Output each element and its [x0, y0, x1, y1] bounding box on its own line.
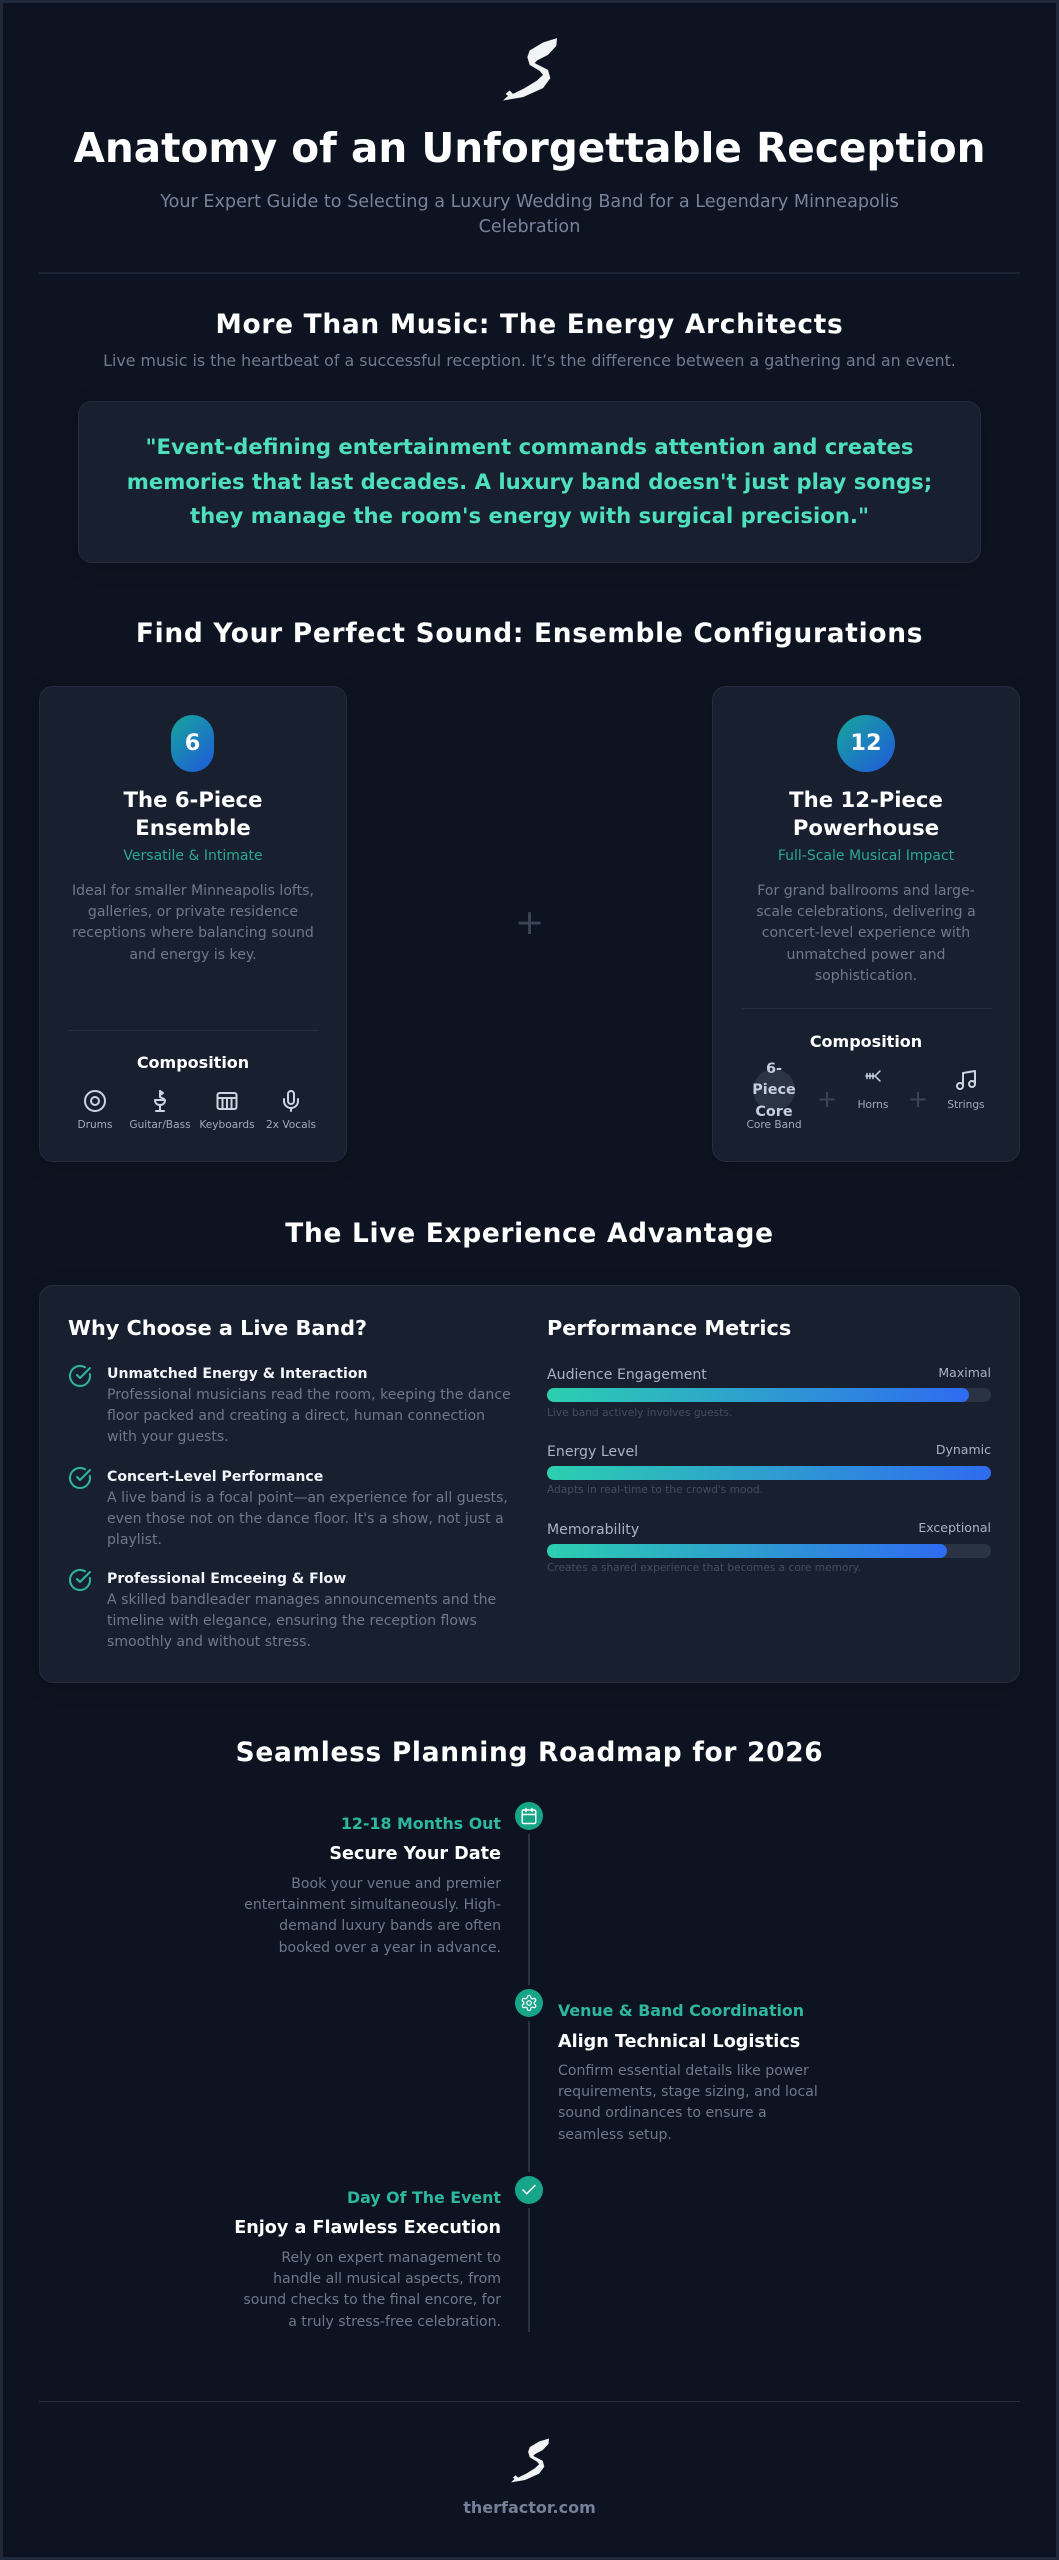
benefit 1 — [68, 1364, 511, 1445]
composition heading: Composition — [810, 1032, 922, 1051]
benefit text — [107, 1387, 511, 1445]
label: strings: Strings — [947, 1099, 985, 1111]
step 1 text — [244, 1876, 501, 1956]
icon: vocals — [283, 1090, 299, 1112]
card title: The 6-Piece — [124, 787, 262, 812]
metric label: energy level: Energy Level — [547, 1444, 638, 1460]
card title: Ensemble — [135, 815, 251, 840]
card description: and energy is key. — [129, 947, 257, 963]
heading: ensemble configurations: Find Your Perfect Sound: Ensemble Configurations — [136, 618, 923, 649]
icon: horns — [865, 1070, 881, 1082]
intro text: Live music is the heartbeat of a successful reception. It’s the difference between a gathering and an event. — [103, 351, 956, 370]
benefit text: timeline with elegance, ensuring the reception flows — [107, 1613, 477, 1629]
subtitle: Your Expert Guide to Selecting a Luxury Wedding Band for a Legendary Minneapolis — [160, 192, 899, 212]
step 3 text: a truly stress-free celebration. — [288, 2314, 501, 2330]
card title — [124, 787, 262, 840]
core band text: 6- — [766, 1061, 782, 1077]
metric bar: audience engagement — [547, 1388, 991, 1402]
label: keyboards: Keyboards — [199, 1119, 255, 1131]
callout: quote — [78, 401, 981, 563]
timeline node: check — [515, 2176, 543, 2204]
card title — [789, 787, 943, 840]
label: core band: Core Band — [746, 1119, 802, 1131]
footer link: therfactor.com — [463, 2498, 596, 2517]
benefit text: A live band is a focal point—an experience for all guests, — [107, 1490, 508, 1506]
subtitle — [160, 192, 899, 237]
icon: plus between cards: + — [515, 903, 544, 943]
benefit text — [107, 1490, 508, 1548]
icon: keyboards — [216, 1092, 238, 1110]
label: drums: Drums — [77, 1119, 113, 1131]
card description: galleries, or private residence — [88, 904, 298, 920]
benefit title: Unmatched Energy & Interaction — [107, 1366, 368, 1382]
panel: 6-piece ensemble — [39, 686, 347, 1162]
icon: check — [68, 1568, 91, 1591]
benefit text: smoothly and without stress. — [107, 1634, 311, 1650]
metric value: maximal: Maximal — [938, 1365, 991, 1380]
benefit 3 — [68, 1568, 496, 1650]
card tagline: Versatile & Intimate — [123, 848, 263, 864]
badge: 6 — [171, 715, 214, 772]
label: vocals: 2x Vocals — [266, 1119, 316, 1131]
card description — [756, 883, 976, 984]
composition heading: Composition — [137, 1053, 249, 1072]
metric value: dynamic: Dynamic — [936, 1442, 991, 1457]
card title: Powerhouse — [793, 815, 939, 840]
metric note: Live band actively involves guests. — [547, 1407, 732, 1419]
step 2 text: seamless setup. — [558, 2127, 672, 2143]
step 1 text: entertainment simultaneously. High- — [244, 1897, 501, 1913]
card description: unmatched power and — [787, 947, 945, 963]
step 3 text: Rely on expert management to — [281, 2250, 501, 2266]
heading: live experience: The Live Experience Advantage — [285, 1218, 774, 1248]
step 3 text: sound checks to the final encore, for — [243, 2292, 501, 2308]
timeline node: gear — [515, 1989, 543, 2017]
header divider — [39, 272, 1020, 274]
badge: 6: 6 — [185, 730, 200, 756]
metric bar: energy level — [547, 1466, 991, 1480]
metric note: Adapts in real-time to the crowd's mood. — [547, 1484, 763, 1496]
card description: For grand ballrooms and large- — [757, 883, 975, 899]
card tagline: Full-Scale Musical Impact — [778, 848, 954, 864]
icon: plus: + — [817, 1085, 837, 1113]
subtitle: Celebration — [479, 217, 580, 237]
step 1 text: demand luxury bands are often — [279, 1918, 501, 1934]
step 2 text: sound ordinances to ensure a — [558, 2105, 767, 2121]
benefit text: even those not on the dance floor. It's a show, not just a — [107, 1511, 504, 1527]
benefit title: Concert-Level Performance — [107, 1469, 323, 1485]
composition divider — [742, 1008, 992, 1009]
step 3 text: handle all musical aspects, from — [273, 2271, 501, 2287]
metric value: exceptional: Exceptional — [918, 1520, 991, 1535]
icon: check — [68, 1466, 91, 1489]
title: Anatomy of an Unforgettable Reception — [73, 124, 986, 172]
step 1 text: Book your venue and premier — [291, 1876, 501, 1892]
card description: Ideal for smaller Minneapolis lofts, — [72, 883, 314, 899]
step 2 label: Venue & Band Coordination — [558, 2001, 804, 2020]
benefit text — [107, 1592, 496, 1650]
quote text — [127, 434, 932, 528]
card description: scale celebrations, delivering a — [756, 904, 976, 920]
heading: roadmap: Seamless Planning Roadmap for 2026 — [236, 1736, 823, 1768]
core band text: Core — [755, 1104, 793, 1120]
card description: sophistication. — [815, 968, 917, 984]
panel: live experience — [39, 1285, 1020, 1683]
icon: guitar/bass — [154, 1090, 166, 1112]
metric label: audience engagement: Audience Engagement — [547, 1367, 707, 1383]
metric label: memorability: Memorability — [547, 1522, 639, 1538]
quote text: memories that last decades. A luxury band doesn't just play songs; — [127, 469, 932, 494]
core band text — [752, 1061, 796, 1120]
benefit text: with your guests. — [107, 1429, 229, 1445]
badge: 12 — [837, 715, 895, 772]
step 2 title: Align Technical Logistics — [558, 2032, 800, 2052]
panel: 12-piece powerhouse — [712, 686, 1020, 1162]
benefit text: A skilled bandleader manages announcements and the — [107, 1592, 496, 1608]
heading: energy architects: More Than Music: The Energy Architects — [216, 309, 843, 340]
timeline line — [528, 1816, 530, 2332]
core band circle — [753, 1069, 795, 1111]
icon: strings — [956, 1070, 976, 1090]
label: horns: Horns — [858, 1099, 888, 1111]
quote text: they manage the room's energy with surgical precision." — [190, 503, 869, 528]
quote text: "Event-defining entertainment commands attention and creates — [145, 434, 914, 459]
benefit text: Professional musicians read the room, keeping the dance — [107, 1387, 511, 1403]
core band text: Piece — [752, 1082, 796, 1098]
metric bar: memorability — [547, 1544, 991, 1558]
composition divider — [68, 1030, 318, 1031]
step 3 text — [243, 2250, 501, 2330]
step 2 text — [558, 2063, 818, 2143]
benefit 2 — [68, 1466, 508, 1548]
icon: check — [68, 1364, 91, 1387]
benefit text: playlist. — [107, 1532, 162, 1548]
step 2 text: Confirm essential details like power — [558, 2063, 809, 2079]
icon: drums — [84, 1090, 106, 1112]
step 2 text: requirements, stage sizing, and local — [558, 2084, 818, 2100]
timeline node: calendar — [515, 1802, 543, 1830]
benefit text: floor packed and creating a direct, human connection — [107, 1408, 485, 1424]
card description — [72, 883, 314, 963]
card description: receptions where balancing sound — [72, 925, 314, 941]
badge: 12: 12 — [850, 730, 882, 756]
benefit title: Professional Emceeing & Flow — [107, 1571, 346, 1587]
heading: why choose: Why Choose a Live Band? — [68, 1316, 367, 1340]
logo: header brush S — [503, 38, 557, 100]
heading: performance metrics: Performance Metrics — [547, 1316, 791, 1340]
card description: concert-level experience with — [762, 925, 970, 941]
logo: footer brush S — [511, 2438, 549, 2482]
label: guitar/bass: Guitar/Bass — [129, 1119, 191, 1131]
step 1 label: 12-18 Months Out — [341, 1814, 501, 1833]
step 1 text: booked over a year in advance. — [279, 1940, 501, 1956]
footer divider — [39, 2401, 1020, 2402]
card title: The 12-Piece — [789, 787, 943, 812]
step 1 title: Secure Your Date — [329, 1844, 501, 1864]
icon: plus: + — [908, 1085, 928, 1113]
step 3 label: Day Of The Event — [347, 2188, 501, 2207]
step 3 title: Enjoy a Flawless Execution — [234, 2218, 501, 2238]
metric note: Creates a shared experience that becomes a core memory. — [547, 1562, 861, 1574]
